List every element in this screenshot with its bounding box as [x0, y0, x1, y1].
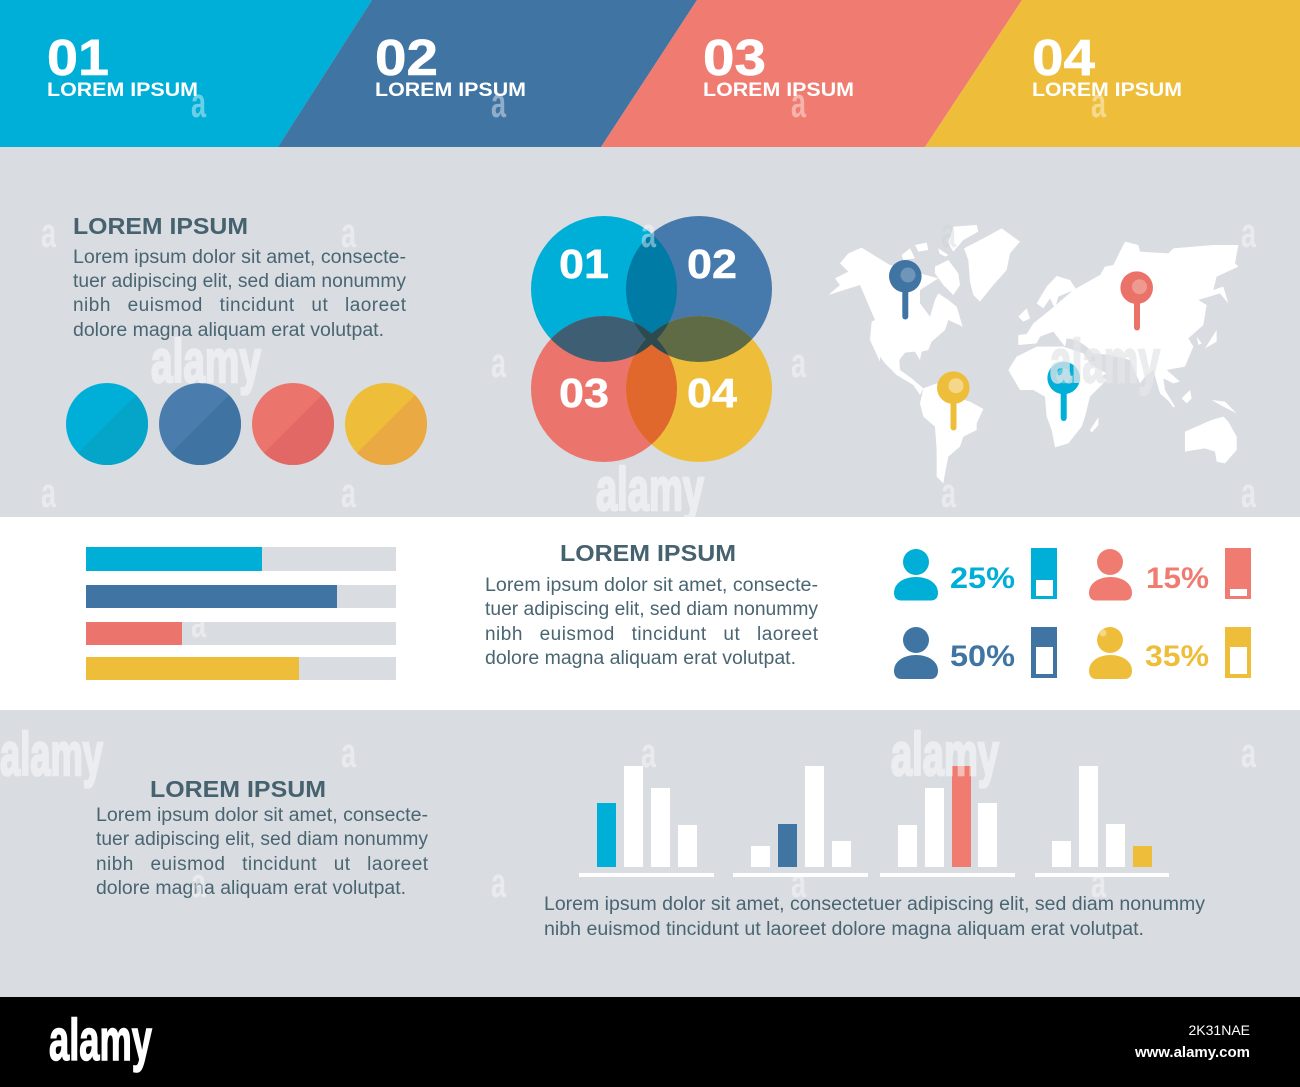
- header banner with four steps: [0, 0, 1300, 147]
- step 2 label: LOREM IPSUM: [375, 79, 526, 101]
- venn label 04: 04: [687, 370, 737, 416]
- progress bar 4: [86, 657, 396, 680]
- overlap 1 and 2: [626, 234, 677, 334]
- bar chart 3: [880, 766, 1015, 877]
- section background: grey lower panel: [0, 710, 1300, 997]
- map: scandinavia: [1037, 276, 1077, 308]
- text block: upper left: tuer adipiscing elit, sed diam nonummy: [73, 271, 407, 292]
- map pin: coral: [1120, 271, 1153, 330]
- watermarks: a: [341, 469, 356, 516]
- map pin: cyan: [1047, 362, 1080, 421]
- text block: upper left: dolore magna aliquam erat volutpat.: [73, 320, 384, 341]
- text block: chart caption: nibh euismod tincidunt ut laoreet dolore magna aliquam erat volutpat.: [544, 919, 1144, 940]
- step 1 label: LOREM IPSUM: [47, 79, 198, 101]
- heading: upper left: LOREM IPSUM: [73, 213, 248, 239]
- watermarks: a: [941, 209, 956, 256]
- watermarks: a: [191, 79, 206, 126]
- watermarks: a: [791, 79, 806, 126]
- overlap 2 and 4: [652, 316, 752, 362]
- heading: lower left: LOREM IPSUM: [150, 776, 326, 802]
- venn circle 3: [531, 316, 677, 462]
- map: south america: [920, 383, 983, 483]
- venn label 03: 03: [559, 370, 609, 416]
- venn circle 4: [626, 316, 772, 462]
- bar charts: [579, 766, 1169, 877]
- text block: middle: dolore magna aliquam erat volutpat.: [485, 648, 796, 669]
- watermarks: a: [1241, 469, 1256, 516]
- map: arabia: [1077, 357, 1107, 383]
- venn circle 2: [626, 216, 772, 362]
- watermarks: alamy: [0, 721, 103, 788]
- map: australia: [1185, 417, 1237, 463]
- watermarks: a: [41, 209, 56, 256]
- text block: middle: [485, 575, 819, 669]
- stat: 15 percent: 15%: [1146, 562, 1209, 595]
- footer logo: alamy: [49, 1008, 152, 1073]
- map: north america: [828, 248, 963, 395]
- text block: middle: Lorem ipsum dolor sit amet, consecte-: [485, 575, 818, 596]
- venn diagram: [531, 216, 772, 462]
- map: madagascar: [1090, 417, 1098, 433]
- watermarks: a: [1241, 729, 1256, 776]
- text block: upper left: nibh euismod tincidunt ut laoreet: [73, 295, 407, 316]
- watermarks: alamy: [891, 721, 999, 788]
- bar chart 4: [1035, 766, 1169, 877]
- step 3 band: [601, 0, 1022, 147]
- section background: grey upper panel: [0, 147, 1300, 517]
- watermarks: a: [641, 729, 656, 776]
- centre overlap green: [652, 316, 682, 339]
- watermarks: alamy: [151, 328, 261, 395]
- text block: lower left: nibh euismod tincidunt ut laoreet: [96, 854, 429, 875]
- watermarks: a: [641, 209, 656, 256]
- map: africa: [1008, 347, 1107, 447]
- step 4 number: 04: [1032, 29, 1096, 86]
- footer bar: [0, 997, 1300, 1087]
- watermarks: a: [491, 859, 506, 906]
- progress bar 2: [86, 585, 396, 608]
- step 2 band: [278, 0, 697, 147]
- step 1 band: [0, 0, 372, 147]
- heading: middle: LOREM IPSUM: [560, 540, 736, 566]
- website: www.alamy.com: [1134, 1044, 1250, 1061]
- centre overlap lower left: [634, 322, 669, 356]
- watermarks: a: [941, 469, 956, 516]
- stat: 15 percent: [1089, 548, 1251, 600]
- venn label 01: 01: [559, 241, 609, 287]
- watermarks: a: [791, 859, 806, 906]
- bar chart 1: [579, 766, 714, 877]
- map pin: blue: [889, 260, 922, 320]
- watermarks: a: [341, 729, 356, 776]
- step 4 band: [925, 0, 1300, 147]
- overlap 1 and 3: [551, 316, 652, 362]
- map: arctic islands: [902, 225, 978, 295]
- stat: 35 percent: 35%: [1145, 640, 1209, 673]
- step 4 label: LOREM IPSUM: [1032, 79, 1182, 101]
- people statistics: [894, 548, 1251, 679]
- swatch: yellow: [345, 383, 427, 465]
- stat: 25 percent: [894, 548, 1057, 600]
- watermarks: a: [341, 209, 356, 256]
- text block: middle: nibh euismod tincidunt ut laoreet: [485, 624, 819, 645]
- watermarks: a: [1091, 859, 1106, 906]
- watermarks: a: [41, 469, 56, 516]
- watermarks: alamy: [596, 456, 704, 523]
- text block: chart caption: [544, 894, 1206, 940]
- overlap 3 and 4: [626, 339, 677, 444]
- stat: 50 percent: [894, 627, 1057, 679]
- swatch: coral: [252, 383, 334, 465]
- venn label 02: 02: [687, 241, 737, 287]
- bar chart 2: [733, 766, 868, 877]
- map: japan and asian islands: [1163, 330, 1237, 413]
- text block: lower left: dolore magna aliquam erat volutpat.: [96, 878, 406, 899]
- progress bar 1: [86, 547, 396, 571]
- stat: 50 percent: 50%: [950, 640, 1015, 673]
- text block: upper left: [73, 247, 407, 341]
- watermarks: a: [191, 599, 206, 646]
- world map: [828, 225, 1238, 483]
- step 3 label: LOREM IPSUM: [703, 79, 854, 101]
- step 2 number: 02: [375, 29, 438, 86]
- text block: chart caption: Lorem ipsum dolor sit amet, consectetuer adipiscing elit, sed diam nonummy: [544, 894, 1206, 915]
- map: britain and iceland: [1018, 308, 1030, 322]
- watermarks: a: [491, 339, 506, 386]
- watermarks: alamy: [1050, 328, 1160, 395]
- text block: lower left: tuer adipiscing elit, sed diam nonummy: [96, 829, 429, 850]
- stat: 25 percent: 25%: [950, 562, 1015, 595]
- watermarks: a: [491, 79, 506, 126]
- centre overlap diagonal: [634, 322, 669, 356]
- text block: lower left: [96, 805, 429, 899]
- map: eurasia: [1018, 242, 1238, 407]
- watermarks: a: [191, 859, 206, 906]
- swatch: cyan: [66, 383, 148, 465]
- watermarks: [0, 79, 1256, 906]
- image id: 2K31NAE: [1189, 1022, 1250, 1038]
- progress bars: [86, 547, 396, 680]
- text block: lower left: Lorem ipsum dolor sit amet, consecte-: [96, 805, 428, 826]
- progress bar 3: [86, 622, 396, 645]
- text block: middle: tuer adipiscing elit, sed diam nonummy: [485, 599, 819, 620]
- venn circle 1: [531, 216, 677, 362]
- text block: upper left: Lorem ipsum dolor sit amet, consecte-: [73, 247, 406, 268]
- watermarks: a: [1091, 79, 1106, 126]
- map: greenland: [964, 228, 1020, 302]
- map pin: yellow: [937, 371, 970, 430]
- stat: 35 percent: [1089, 627, 1251, 679]
- section background: white middle band: [0, 517, 1300, 710]
- step 3 number: 03: [703, 29, 766, 86]
- swatch: blue: [159, 383, 241, 465]
- watermarks: a: [791, 339, 806, 386]
- watermarks: a: [1241, 209, 1256, 256]
- step 1 number: 01: [47, 29, 109, 86]
- colour swatch circles: [66, 383, 427, 465]
